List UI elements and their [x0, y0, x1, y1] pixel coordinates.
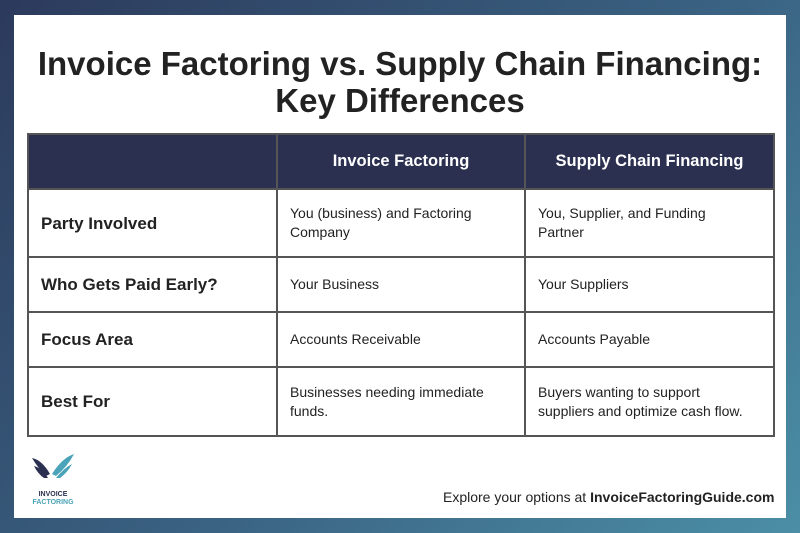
comparison table: Accounts Payable [538, 331, 650, 347]
comparison table: Invoice Factoring [333, 152, 469, 170]
comparison table: Focus Area [41, 330, 133, 349]
comparison table: Accounts Receivable [290, 331, 421, 347]
logo: INVOICE [39, 491, 67, 498]
comparison table: Your Suppliers [538, 276, 629, 292]
comparison table [27, 133, 775, 437]
comparison table: You, Supplier, and Funding Partner [538, 205, 706, 240]
comparison table: Buyers wanting to support suppliers and optimize cash flow. [538, 384, 743, 418]
title: Invoice Factoring vs. Supply Chain Financing: [38, 45, 762, 82]
comparison table: Your Business [290, 276, 379, 292]
comparison table: Party Involved [41, 214, 157, 232]
comparison table: Who Gets Paid Early? [41, 275, 218, 294]
comparison table: You (business) and Factoring Company [290, 205, 472, 240]
text: FACTORING [32, 499, 74, 506]
title: Key Differences [275, 82, 525, 119]
comparison table: Businesses needing immediate funds. [290, 384, 484, 418]
logo [32, 454, 74, 506]
footer text: Explore your options at InvoiceFactoringGuide.com [443, 489, 774, 505]
title [38, 45, 762, 119]
comparison table: Supply Chain Financing [556, 152, 743, 170]
comparison table: Best For [41, 392, 110, 411]
